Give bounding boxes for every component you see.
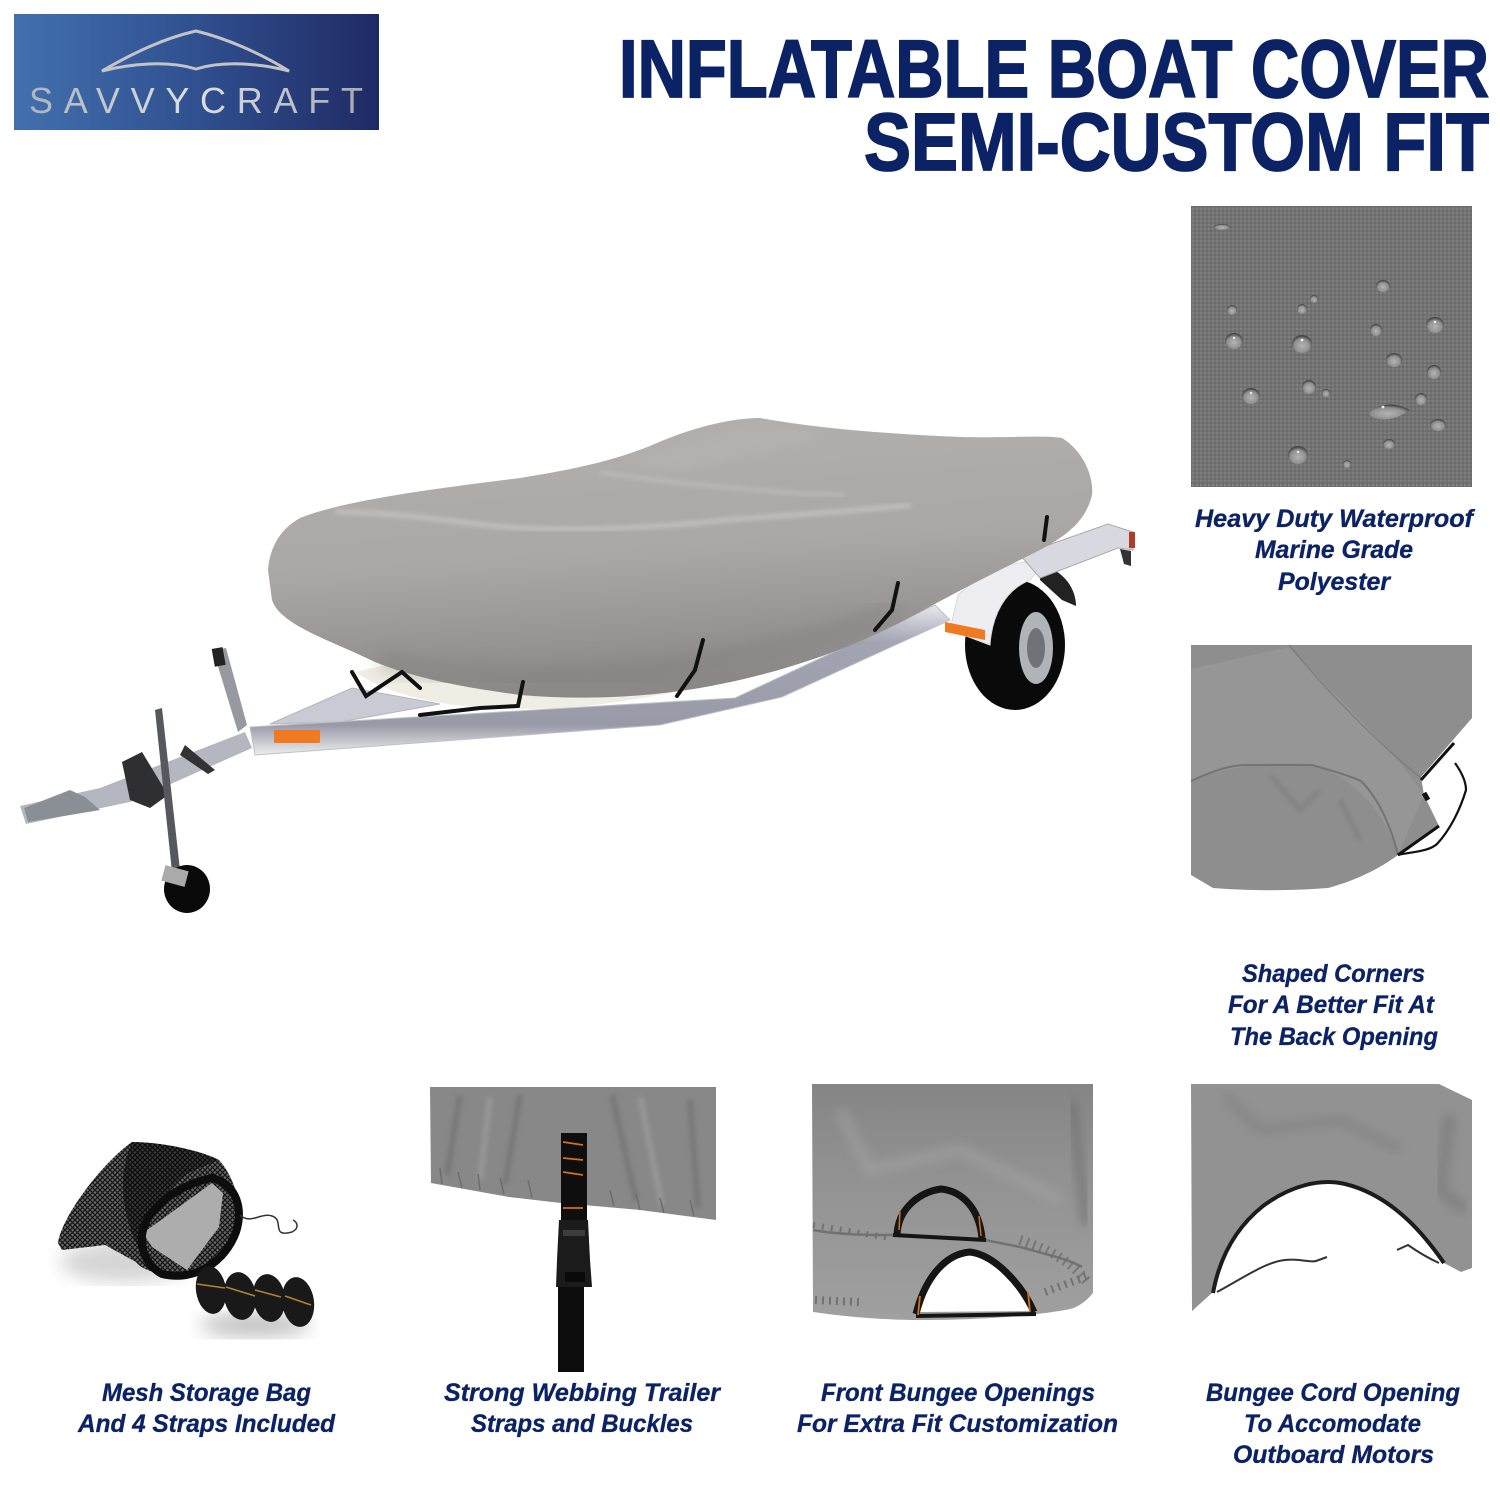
fender (950, 561, 1045, 645)
panel: bungee cord opening (1191, 1084, 1472, 1311)
upper strap loop (897, 1189, 982, 1238)
trailer frame (20, 605, 950, 913)
caption: mesh bag: Mesh Storage Bag (102, 1379, 311, 1407)
four rolled straps (193, 1264, 317, 1329)
main image: boat cover on trailer (20, 418, 1135, 913)
caption: webbing: Strong Webbing Trailer (444, 1379, 721, 1407)
panel: webbing strap and buckle (430, 1087, 716, 1372)
icon: mesh storage bag and straps (58, 1142, 317, 1337)
panel: front bungee openings (812, 1084, 1093, 1320)
lower cut-out opening (920, 1252, 1030, 1312)
caption: shaped corners (1228, 960, 1438, 1051)
droplet highlights (1233, 321, 1436, 453)
caption: shaped corners: For A Better Fit At (1228, 991, 1436, 1019)
straps (352, 517, 1047, 715)
caption: webbing (444, 1379, 721, 1438)
caption: mesh bag: And 4 Straps Included (77, 1410, 336, 1438)
logo: Savvycraft (14, 14, 379, 130)
marker lights (274, 730, 320, 743)
caption: front bungee: For Extra Fit Customization (797, 1410, 1118, 1438)
caption: front bungee: Front Bungee Openings (821, 1379, 1095, 1407)
caption: mesh bag (77, 1379, 336, 1438)
caption: fabric: Marine Grade (1255, 536, 1413, 564)
caption: fabric: Polyester (1278, 568, 1391, 596)
caption: shaped corners: The Back Opening (1230, 1023, 1438, 1051)
title (619, 24, 1489, 188)
panel: shaped corners (1191, 645, 1472, 890)
cover (268, 418, 1092, 698)
caption: front bungee (797, 1379, 1118, 1438)
panel: waterproof fabric swatch (1191, 206, 1472, 487)
logo: Savvycraft: SAVVYCRAFT (29, 80, 363, 121)
caption: fabric (1195, 505, 1476, 596)
rear rail (1020, 524, 1133, 578)
caption: bungee cord: Outboard Motors (1233, 1441, 1434, 1469)
hull (355, 570, 960, 709)
caption: bungee cord: To Accomodate (1244, 1410, 1421, 1438)
caption: shaped corners: Shaped Corners (1242, 960, 1425, 988)
water droplets (1214, 224, 1446, 468)
trailer wheel (965, 565, 1076, 710)
caption: bungee cord (1206, 1379, 1460, 1469)
caption: fabric: Heavy Duty Waterproof (1195, 505, 1476, 533)
caption: bungee cord: Bungee Cord Opening (1206, 1379, 1460, 1407)
caption: webbing: Straps and Buckles (471, 1410, 693, 1438)
